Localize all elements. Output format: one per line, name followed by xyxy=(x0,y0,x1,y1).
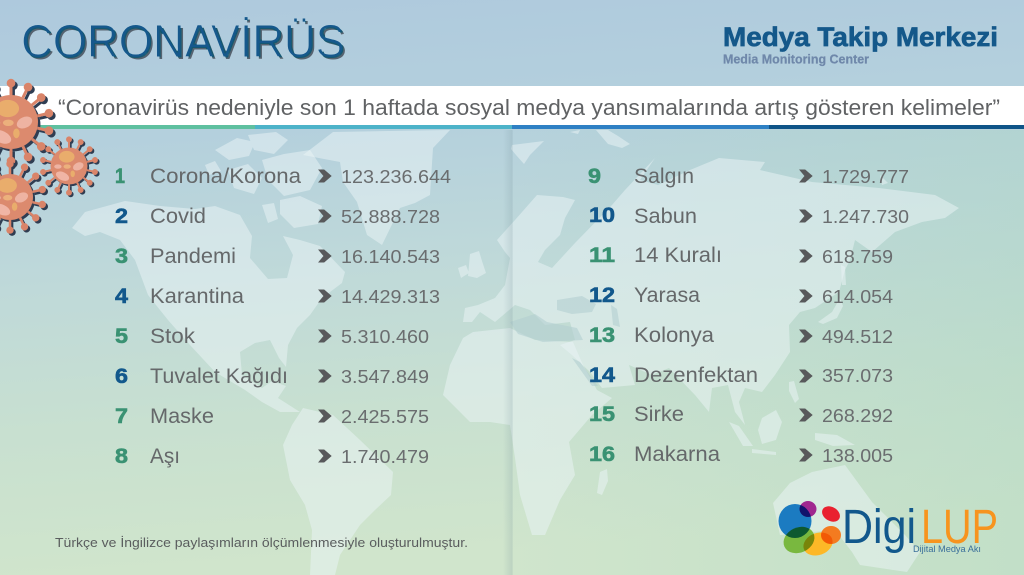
row 7: 2.425.575 xyxy=(341,406,429,427)
map: Arctic islands xyxy=(205,132,322,228)
row 3: 16.140.543 xyxy=(341,246,440,267)
subtitle band: “Coronavirüs nedeniyle son 1 haftada sosyal medya yansımalarında artış gösteren kelimeler” xyxy=(58,95,1000,120)
row 5 xyxy=(115,325,429,348)
row 2: 52.888.728 xyxy=(341,206,440,227)
logo: DigiLUP: Digi xyxy=(842,501,916,554)
map: inland seas xyxy=(510,296,620,386)
map: North America xyxy=(72,201,345,412)
map: Africa xyxy=(443,328,612,535)
row 9: 9 xyxy=(588,165,601,188)
icon: virus small xyxy=(39,136,100,197)
row 1: 1 xyxy=(115,165,125,188)
row 10: 10 xyxy=(589,204,615,227)
row 13: Kolonya xyxy=(634,324,714,347)
row 15 xyxy=(589,403,893,426)
row 8 xyxy=(115,445,429,468)
row 13: 494.512 xyxy=(822,326,893,347)
row 8: 8 xyxy=(115,445,128,468)
row 15: 15 xyxy=(589,403,615,426)
row 14: 14 xyxy=(589,364,615,387)
row 1: Corona/Korona xyxy=(150,165,301,188)
row 3: Pandemi xyxy=(150,245,236,268)
map: Australia xyxy=(773,465,920,572)
fold line xyxy=(503,130,513,575)
list: left column xyxy=(115,165,451,468)
subtitle band xyxy=(0,86,1024,129)
row 16: 138.005 xyxy=(822,445,893,466)
row 7: Maske xyxy=(150,405,214,428)
row 11: 14 Kuralı xyxy=(634,244,722,267)
brand: Medya Takip Merkezi xyxy=(723,22,998,66)
row 10: Sabun xyxy=(634,205,697,228)
row 14 xyxy=(589,364,893,387)
row 7 xyxy=(115,405,429,428)
row 9 xyxy=(588,165,909,188)
row 7: 7 xyxy=(115,405,128,428)
row 5: Stok xyxy=(150,325,196,348)
map: smaller islands xyxy=(458,130,888,495)
row 12 xyxy=(589,284,893,307)
row 6: 3.547.849 xyxy=(341,366,429,387)
world map xyxy=(72,130,959,575)
row 10 xyxy=(589,204,909,228)
row 8: Aşı xyxy=(150,445,180,468)
row 14: Dezenfektan xyxy=(634,364,758,387)
row 5: 5 xyxy=(115,325,128,348)
list: right column xyxy=(588,165,909,466)
footnote: Türkçe ve İngilizce paylaşımların ölçümlenmesiyle oluşturulmuştur. xyxy=(55,535,468,550)
row 15: 268.292 xyxy=(822,405,893,426)
row 9: 1.729.777 xyxy=(822,166,909,187)
row 16: 16 xyxy=(589,443,615,466)
logo: DigiLUP: Dijital Medya Akı xyxy=(913,544,981,555)
row 6: 6 xyxy=(115,365,128,388)
row 11: 618.759 xyxy=(822,246,893,267)
row 11 xyxy=(589,244,893,267)
map: Greenland xyxy=(303,130,450,245)
row 16 xyxy=(589,443,893,466)
row 3 xyxy=(115,245,440,268)
row 4 xyxy=(115,285,440,308)
row 1 xyxy=(115,165,451,188)
row 4: 4 xyxy=(115,285,128,308)
map: Eurasia xyxy=(463,158,959,425)
row 12: Yarasa xyxy=(634,284,700,307)
row 13 xyxy=(589,324,893,347)
row 9: Salgın xyxy=(634,165,694,188)
brand: Medya Takip Merkezi: Medya Takip Merkezi xyxy=(723,22,998,52)
row 6 xyxy=(115,365,429,388)
map: South America xyxy=(283,408,393,575)
row 4: Karantina xyxy=(150,285,244,308)
title: CORONAVİRÜS xyxy=(24,18,348,70)
row 1: 123.236.644 xyxy=(341,166,451,187)
row 2: Covid xyxy=(150,205,206,228)
row 14: 357.073 xyxy=(822,365,893,386)
title: CORONAVİRÜS xyxy=(21,15,345,67)
logo icon: coloured bubbles xyxy=(778,501,843,559)
row 3: 3 xyxy=(115,245,128,268)
row 12: 12 xyxy=(589,284,615,307)
row 13: 13 xyxy=(589,324,615,347)
row 6: Tuvalet Kağıdı xyxy=(150,365,288,388)
row 4: 14.429.313 xyxy=(341,286,440,307)
row 15: Sirke xyxy=(634,403,684,426)
brand: Medya Takip Merkezi: Media Monitoring Center xyxy=(723,52,869,66)
row 16: Makarna xyxy=(634,443,720,466)
row 8: 1.740.479 xyxy=(341,446,429,467)
row 5: 5.310.460 xyxy=(341,326,429,347)
row 2: 2 xyxy=(115,205,128,228)
row 11: 11 xyxy=(589,244,615,267)
logo: DigiLUP: LUP xyxy=(921,501,998,554)
row 10: 1.247.730 xyxy=(822,206,909,227)
icon: virus large xyxy=(0,79,56,168)
logo: DigiLUP xyxy=(778,501,998,559)
row 2 xyxy=(115,205,440,228)
row 12: 614.054 xyxy=(822,286,893,307)
icon: virus medium xyxy=(0,160,49,236)
